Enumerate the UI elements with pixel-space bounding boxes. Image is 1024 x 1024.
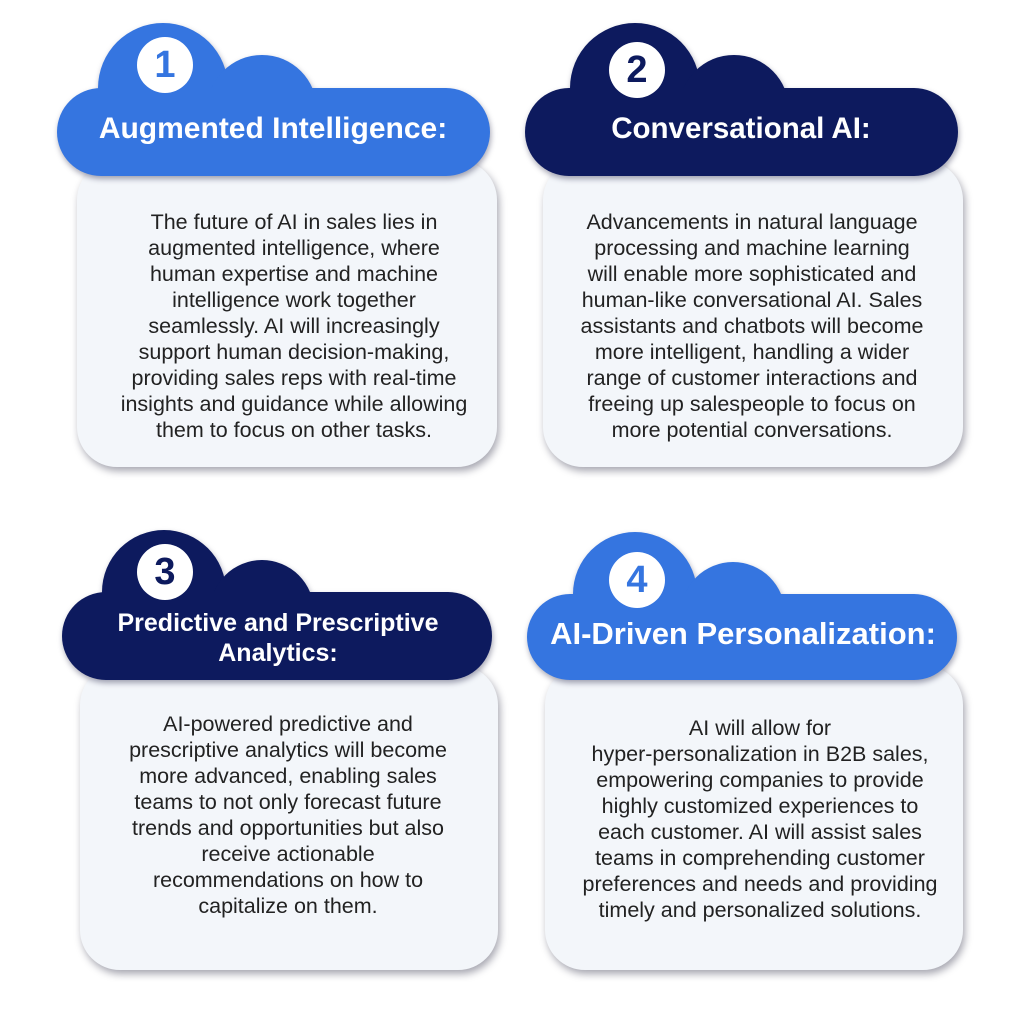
icon: number 4: 4 [626, 559, 648, 601]
text block: assistants and chatbots will become [580, 314, 923, 338]
text block: more intelligent, handling a wider [595, 340, 909, 364]
text block: will enable more sophisticated and [588, 262, 916, 286]
text block: processing and machine learning [594, 236, 910, 260]
icon: number 2: 2 [626, 49, 648, 91]
text block: more advanced, enabling sales [139, 764, 437, 788]
text block [121, 210, 467, 442]
text block: teams to not only forecast future [134, 790, 442, 814]
panel: Augmented Intelligence [54, 22, 504, 476]
panel: AI-Driven Personalization [524, 532, 970, 979]
text block: providing sales reps with real-time [131, 366, 457, 390]
heading: Conversational AI: [611, 112, 871, 145]
heading: Analytics: [218, 639, 338, 667]
text block: range of customer interactions and [586, 366, 918, 390]
panel: Predictive and Prescriptive Analytics [60, 530, 505, 979]
heading: AI-Driven Personalization: [550, 616, 936, 651]
text block: Advancements in natural language [586, 210, 918, 234]
icon: number 2 [609, 42, 665, 98]
icon: number 4 [609, 552, 665, 608]
text block: insights and guidance while allowing [121, 392, 467, 416]
panel: Conversational AI [522, 22, 970, 476]
text block: human expertise and machine [150, 262, 438, 286]
heading: Predictive and Prescriptive [118, 609, 438, 637]
text block: seamlessly. AI will increasingly [148, 314, 440, 338]
text block [129, 712, 447, 918]
text block: intelligence work together [172, 288, 416, 312]
text block: teams in comprehending customer [595, 846, 925, 870]
icon: number 3: 3 [154, 551, 176, 593]
text block: AI-powered predictive and [163, 712, 413, 736]
text block: AI will allow for [689, 716, 831, 740]
heading [118, 609, 438, 667]
text block: receive actionable [201, 842, 375, 866]
text block: The future of AI in sales lies in [151, 210, 437, 234]
text block: more potential conversations. [612, 418, 892, 442]
text block: augmented intelligence, where [148, 236, 440, 260]
text block: timely and personalized solutions. [599, 898, 921, 922]
text block: preferences and needs and providing [582, 872, 938, 896]
text block: recommendations on how to [153, 868, 423, 892]
icon: number 1 [137, 37, 193, 93]
text block: human-like conversational AI. Sales [582, 288, 922, 312]
text block: each customer. AI will assist sales [598, 820, 922, 844]
text block: empowering companies to provide [596, 768, 924, 792]
text block: support human decision-making, [139, 340, 449, 364]
text block [580, 210, 923, 442]
heading: Augmented Intelligence: [99, 112, 447, 145]
text block: hyper-personalization in B2B sales, [591, 742, 929, 766]
text block: freeing up salespeople to focus on [588, 392, 916, 416]
text block: prescriptive analytics will become [129, 738, 447, 762]
text block: them to focus on other tasks. [156, 418, 432, 442]
text block: trends and opportunities but also [132, 816, 444, 840]
text block: capitalize on them. [198, 894, 378, 918]
icon: number 1: 1 [154, 44, 176, 86]
text block [582, 716, 938, 922]
icon: number 3 [137, 544, 193, 600]
text block: highly customized experiences to [602, 794, 918, 818]
